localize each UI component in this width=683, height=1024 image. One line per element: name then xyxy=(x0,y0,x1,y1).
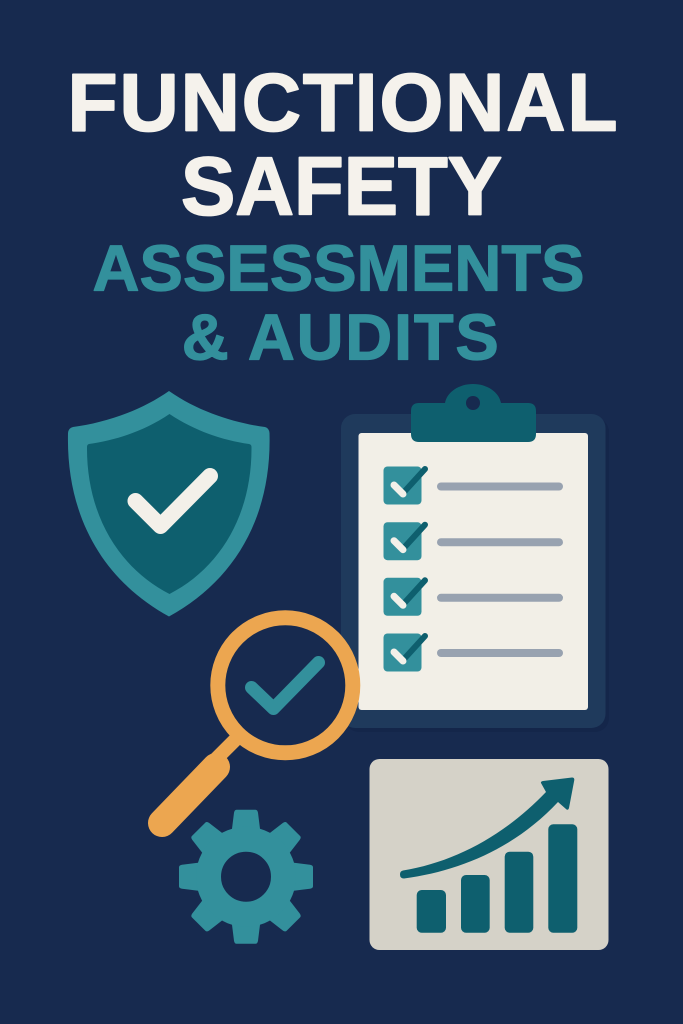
checkbox 3 xyxy=(384,578,422,616)
shield check mark xyxy=(136,476,210,526)
check stroke 3 xyxy=(404,580,425,603)
text line 3 xyxy=(437,594,563,602)
bar chart xyxy=(417,824,577,933)
icon: magnifying glass with check xyxy=(162,618,353,823)
clipboard board xyxy=(341,414,606,728)
subtitle xyxy=(92,232,584,374)
checkbox 4 xyxy=(384,634,422,672)
checklist item 1 xyxy=(384,466,563,504)
trend arrow xyxy=(400,778,574,878)
gear body xyxy=(208,839,284,914)
subtitle line: and Audits: & AUDITS xyxy=(182,300,499,374)
check stroke 4 xyxy=(404,636,425,658)
checklist item 4 xyxy=(384,634,563,672)
chart background xyxy=(370,759,608,950)
text line 2 xyxy=(437,538,563,546)
icon: clipboard checklist xyxy=(341,384,609,732)
shield inner xyxy=(87,414,252,594)
title line: Functional: FUNCTIONAL xyxy=(68,57,618,148)
check stroke 1 xyxy=(404,469,425,492)
clipboard shadow xyxy=(345,418,609,732)
check 1 xyxy=(394,485,403,494)
checklist item 3 xyxy=(384,578,563,616)
title xyxy=(68,57,618,232)
checkbox 1 xyxy=(384,466,422,504)
checklist item 2 xyxy=(384,522,563,560)
clipboard paper xyxy=(358,433,588,710)
magnifier handle neck xyxy=(216,737,238,759)
magnifier ring xyxy=(218,618,353,753)
clipboard clip xyxy=(411,384,536,442)
icon: gear xyxy=(179,810,313,944)
check 2 xyxy=(394,541,403,550)
icon: safety shield with check xyxy=(68,391,270,616)
check 3 xyxy=(394,596,403,605)
text line 1 xyxy=(437,482,563,490)
checkbox 2 xyxy=(384,522,422,560)
panel: growth chart xyxy=(370,759,608,950)
shield outer xyxy=(68,391,270,616)
magnifier handle xyxy=(162,767,216,823)
text line 4 xyxy=(437,649,563,657)
clip hole xyxy=(466,396,480,410)
magnifier check xyxy=(252,662,318,708)
title line: Safety: SAFETY xyxy=(181,139,502,232)
gear teeth xyxy=(179,810,313,944)
check 4 xyxy=(394,652,403,661)
subtitle line: Assessments: ASSESSMENTS xyxy=(92,232,584,304)
check stroke 2 xyxy=(404,525,425,547)
